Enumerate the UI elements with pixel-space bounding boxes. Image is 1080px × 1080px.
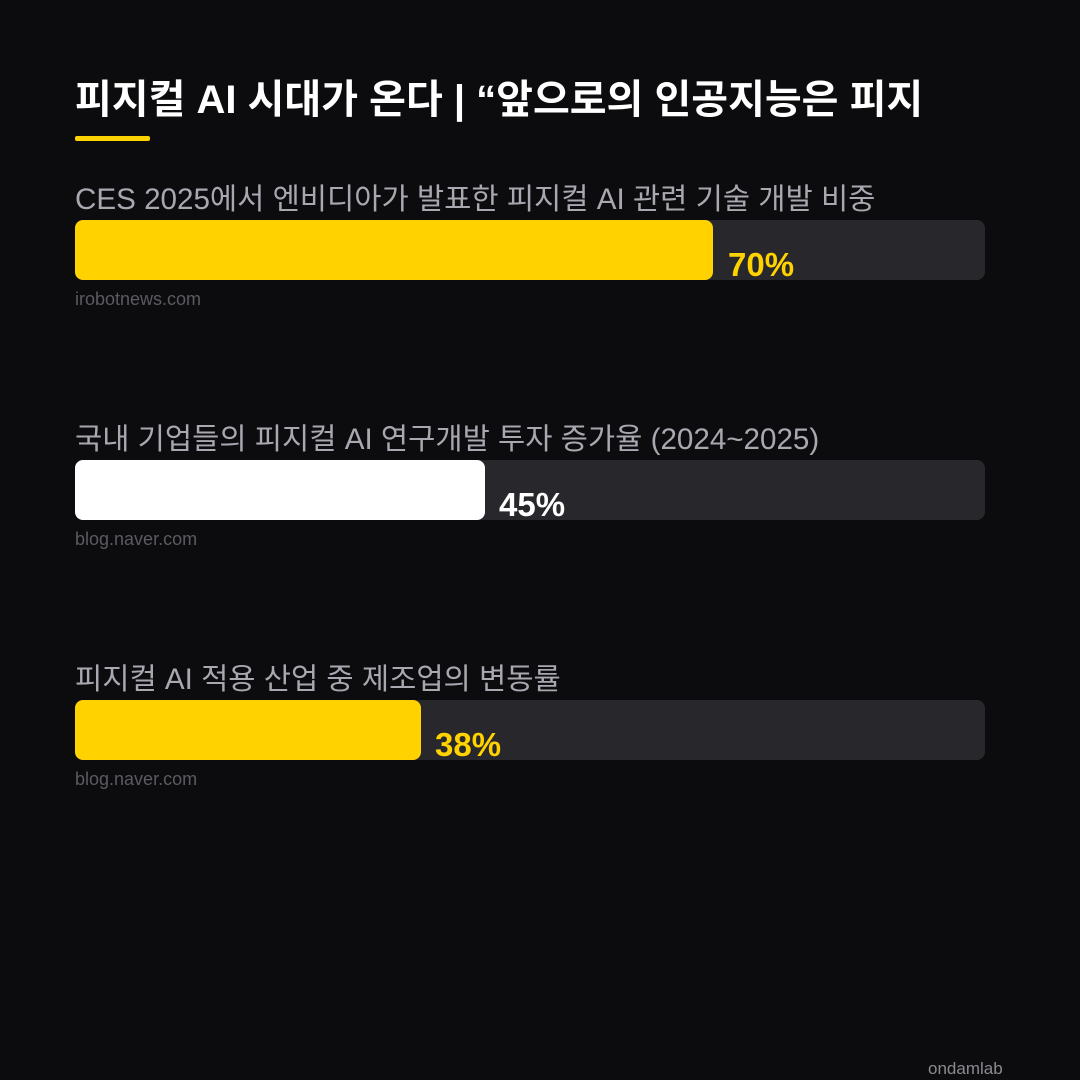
title: 피지컬 AI 시대가 온다 | “앞으로의 인공지능은 피지 [75,78,923,122]
bar 2 [75,460,985,520]
source 3: blog.naver.com [75,769,197,789]
footer brand: ondamlab [928,1059,1003,1078]
value 3: 38% [435,726,501,763]
value 2: 45% [499,486,565,523]
source 1: irobotnews.com [75,289,201,309]
bar 1 [75,220,985,280]
source 2: blog.naver.com [75,529,197,549]
label 3: 피지컬 AI 적용 산업 중 제조업의 변동률 [75,663,561,696]
bar 3 [75,700,985,760]
label 1: CES 2025에서 엔비디아가 발표한 피지컬 AI 관련 기술 개발 비중 [75,183,875,216]
value 1: 70% [728,246,794,283]
label 2: 국내 기업들의 피지컬 AI 연구개발 투자 증가율 (2024~2025) [75,423,819,456]
